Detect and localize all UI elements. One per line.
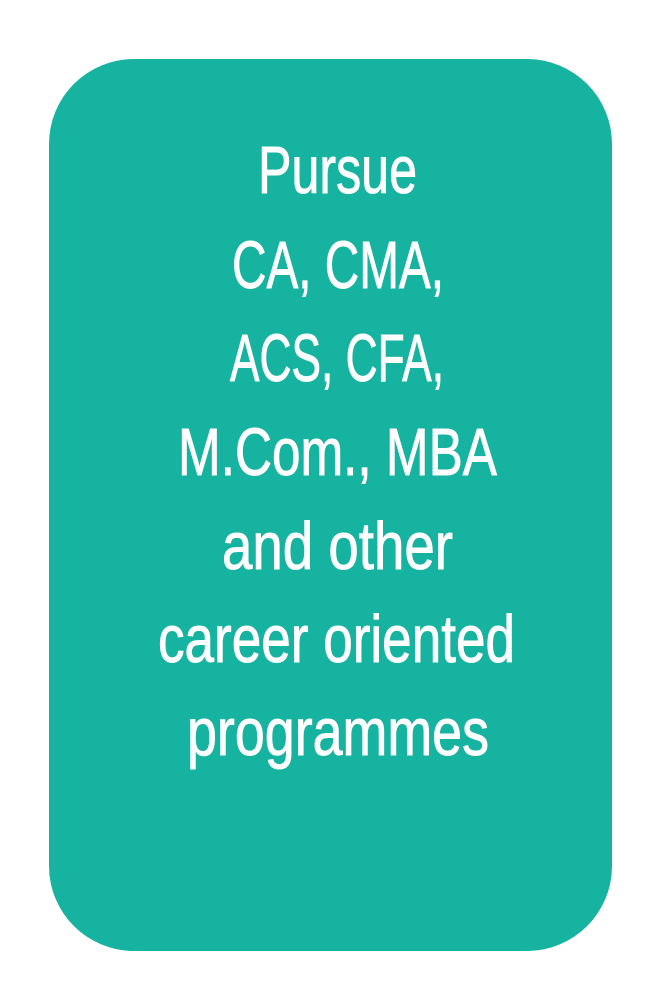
panel: teal rounded card — [49, 59, 612, 951]
text block: pursue career programmes — [158, 133, 515, 770]
text line: ACS, CFA,: ACS, CFA, — [230, 321, 444, 396]
text line: programmes: programmes — [187, 695, 489, 770]
text line: career oriented: career oriented — [158, 602, 515, 677]
text line: CA, CMA,: CA, CMA, — [232, 228, 444, 303]
text line: M.Com., MBA: M.Com., MBA — [178, 415, 497, 490]
text line: Pursue: Pursue — [258, 133, 417, 208]
text line: and other: and other — [222, 509, 453, 584]
